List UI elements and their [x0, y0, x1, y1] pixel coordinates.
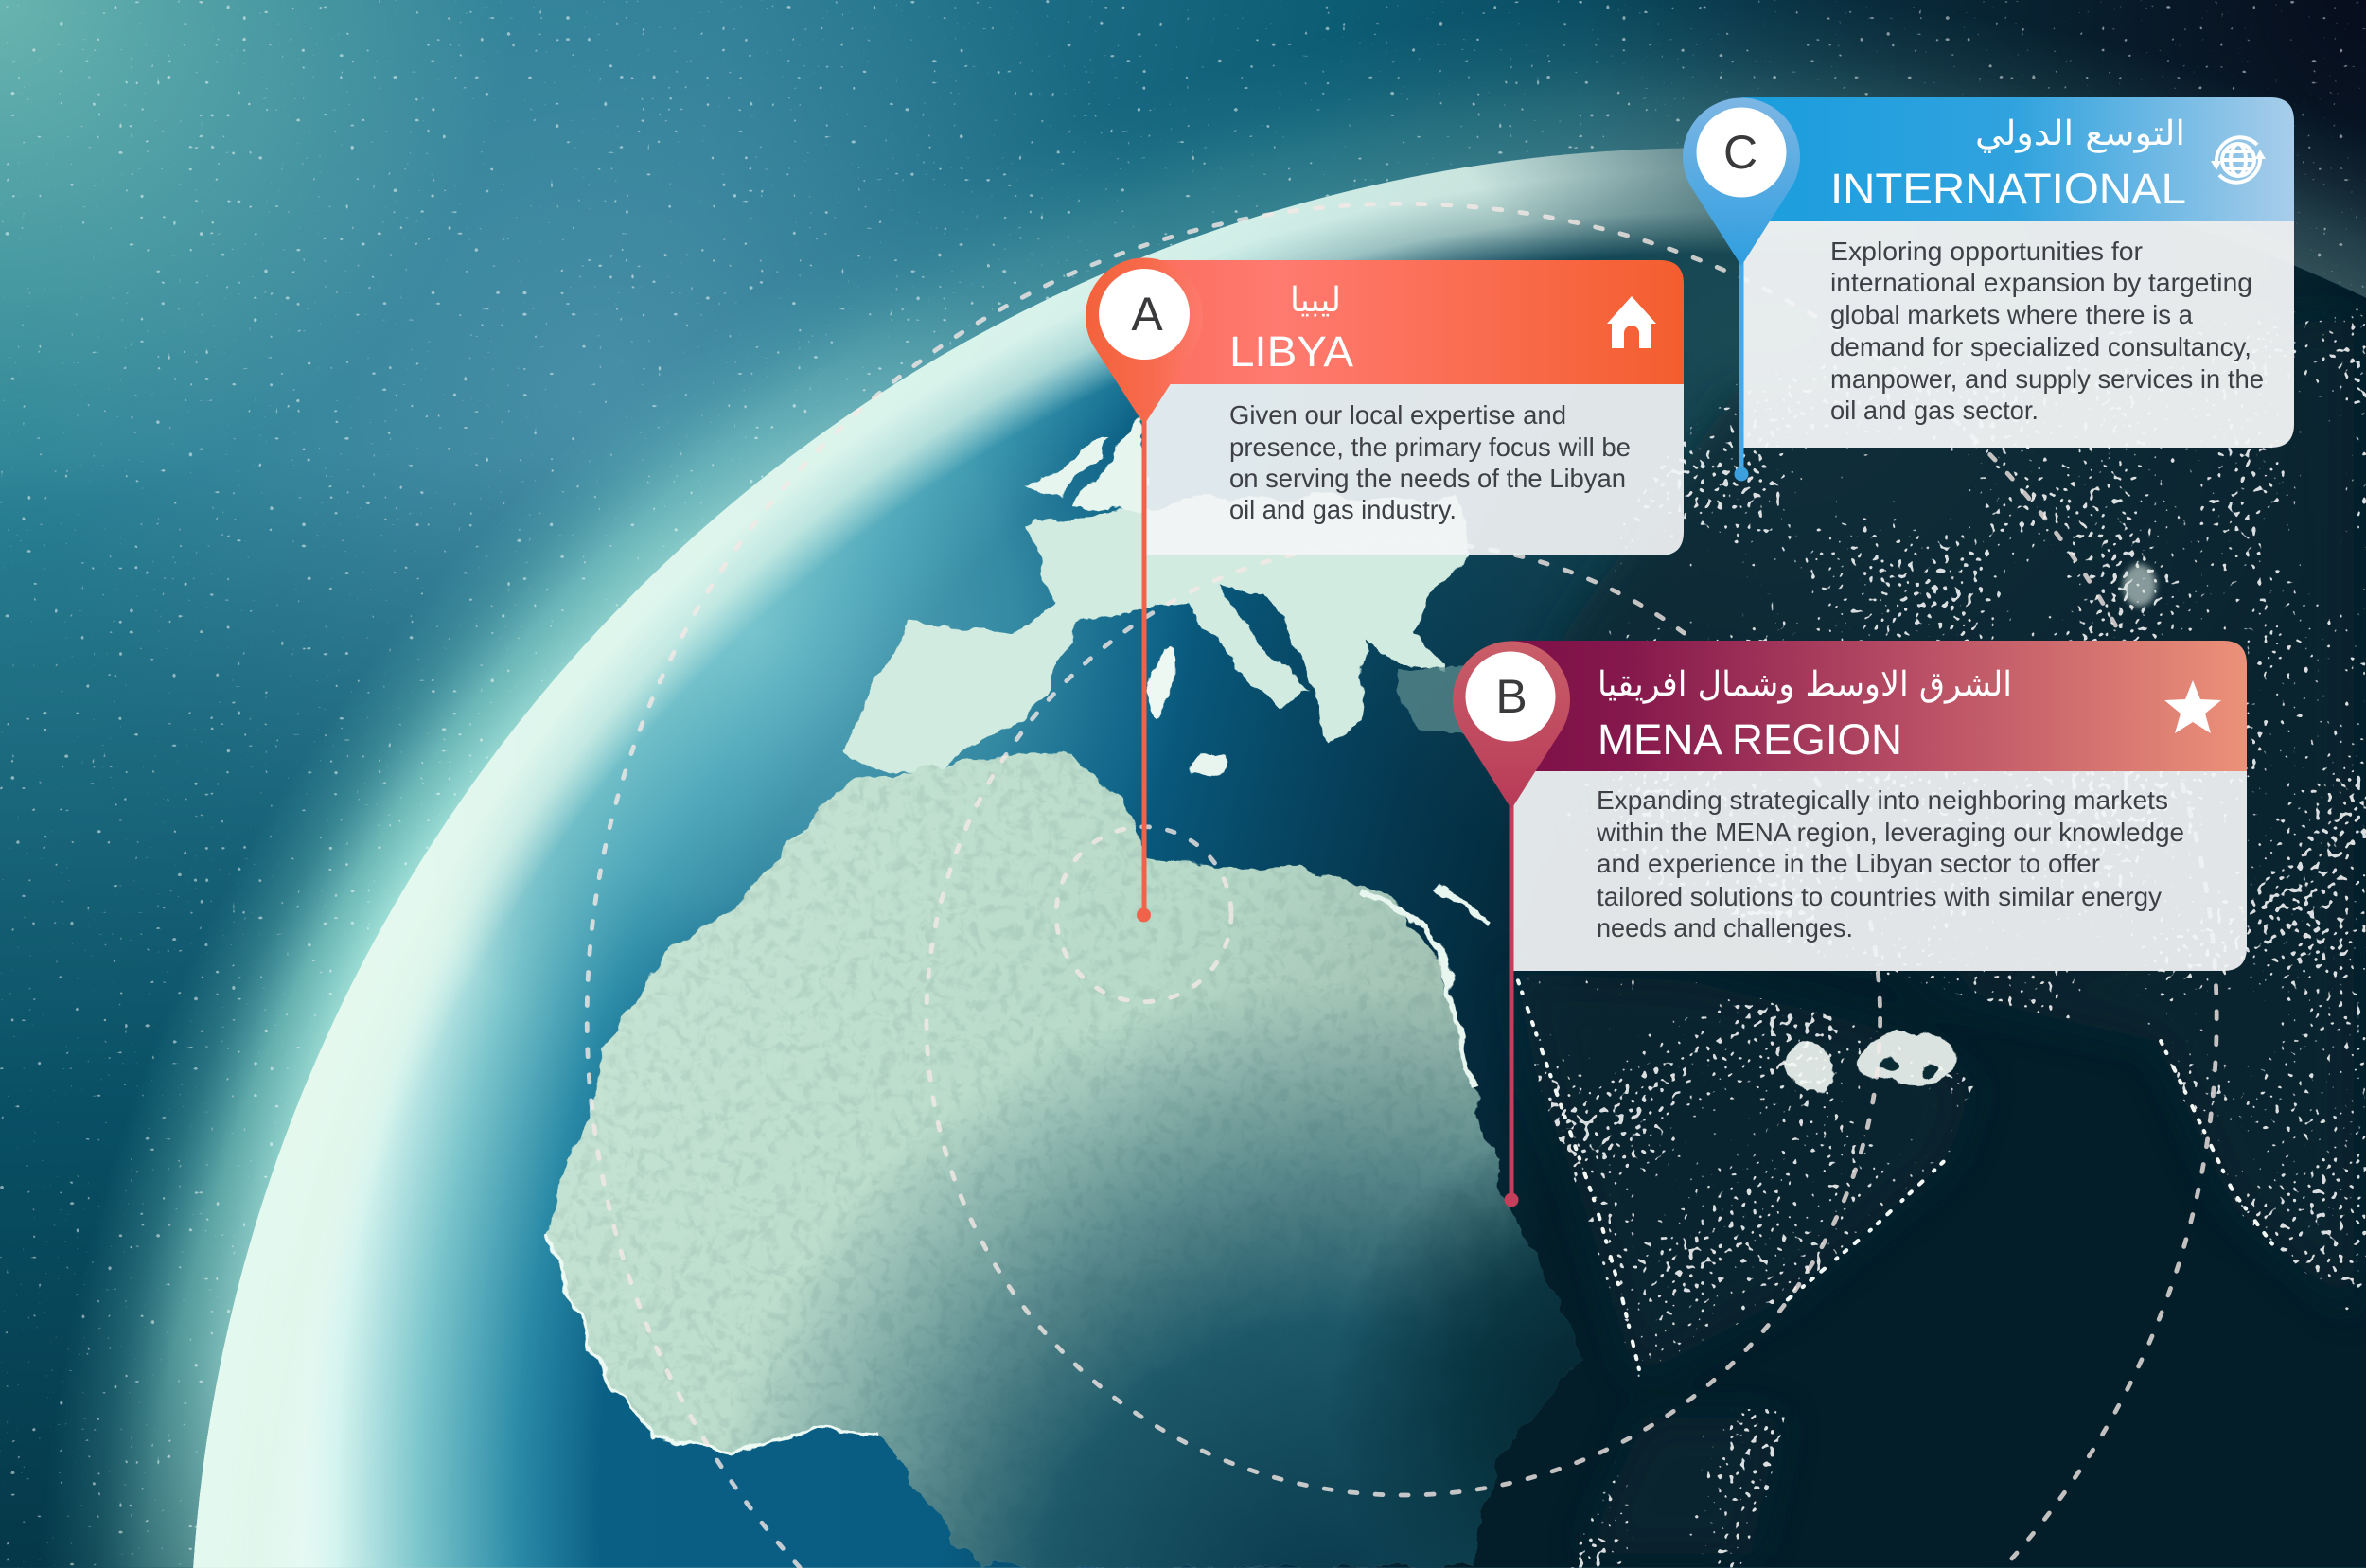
panel: A libya [1086, 258, 1684, 923]
text block B: and experience in the Libyan sector to offer [1597, 849, 2100, 878]
card header C [1741, 97, 2294, 221]
badge C: C [1723, 126, 1757, 179]
title A: LIBYA [1229, 327, 1353, 376]
text block A: oil and gas industry. [1229, 495, 1457, 524]
badge B: B [1495, 670, 1527, 723]
pin stem B [1505, 800, 1518, 1207]
title B: MENA REGION [1598, 715, 1902, 764]
text block C: manpower, and supply services in the [1830, 364, 2264, 394]
dashed orbit rings [587, 203, 2216, 1568]
badge A [1099, 269, 1190, 360]
card body B [1511, 771, 2247, 971]
text block B: tailored solutions to countries with similar energy [1597, 882, 2162, 911]
text block B: within the MENA region, leveraging our knowledge [1596, 818, 2184, 847]
arabic title C: التوسع الدولي [1975, 115, 2185, 153]
icon: globe [2211, 137, 2266, 183]
text block B [1596, 785, 2184, 943]
text block C: global markets where there is a [1830, 300, 2193, 329]
title C: INTERNATIONAL [1830, 165, 2186, 213]
card header B [1511, 641, 2247, 771]
text block C [1830, 237, 2264, 425]
pin stem A [1137, 416, 1151, 922]
text block A: on serving the needs of the Libyan [1229, 464, 1626, 493]
card header A [1144, 260, 1684, 384]
text block B: needs and challenges. [1597, 913, 1853, 943]
text block A: presence, the primary focus will be [1229, 432, 1631, 462]
arabic title A: ليبيا [1290, 281, 1341, 320]
text block C: Exploring opportunities for [1830, 237, 2143, 266]
badge C [1696, 108, 1787, 197]
text block A: Given our local expertise and [1229, 400, 1566, 430]
panel: B mena region [1453, 641, 2247, 1207]
text block B: Expanding strategically into neighboring markets [1597, 785, 2168, 815]
panel: C international [1683, 97, 2294, 481]
pin C [1683, 98, 1800, 266]
card body A [1144, 384, 1684, 555]
text block C: international expansion by targeting [1830, 268, 2252, 297]
text block A [1229, 400, 1631, 524]
icon: star [2164, 680, 2221, 733]
badge A: A [1131, 288, 1163, 341]
card body C [1741, 221, 2294, 448]
pin A [1086, 258, 1203, 425]
pin B [1453, 642, 1570, 809]
pin stem C [1734, 255, 1749, 481]
badge B [1465, 651, 1556, 742]
arabic title B: الشرق الاوسط وشمال افريقيا [1598, 665, 2012, 704]
text block C: oil and gas sector. [1830, 396, 2039, 425]
icon: house [1607, 296, 1656, 348]
text block C: demand for specialized consultancy, [1830, 332, 2251, 361]
